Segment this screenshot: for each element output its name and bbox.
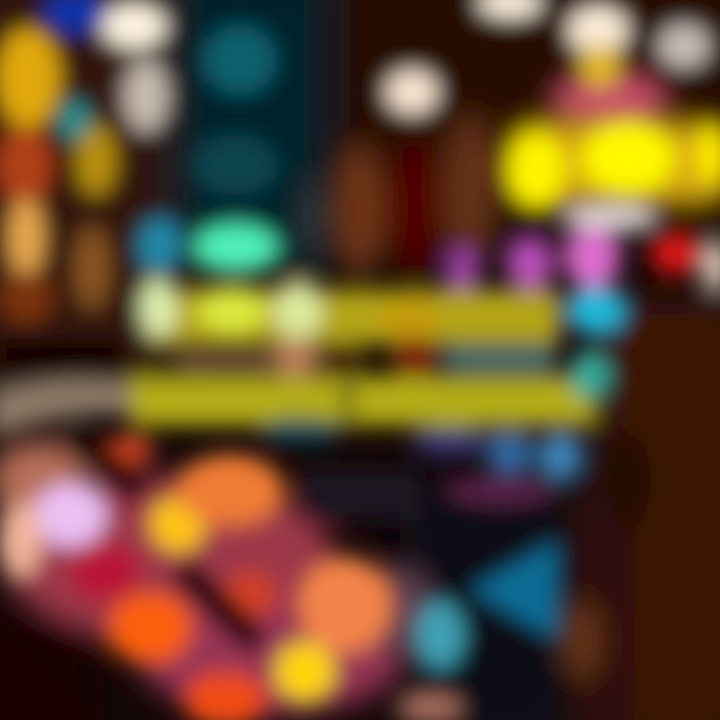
- teal and blue tiles under the title: [258, 351, 610, 504]
- yellow lantern top right: [508, 44, 720, 230]
- teal glow sign: [194, 224, 278, 272]
- left storefront lights: [0, 0, 120, 370]
- center teal signs: [138, 26, 278, 274]
- dark diagonal gaps: [0, 421, 420, 720]
- title: blurred yellow banner: [130, 278, 595, 432]
- right dark-red column: [560, 320, 720, 720]
- brown hanging shapes: [294, 110, 498, 282]
- teal triangle lower right: [470, 540, 558, 640]
- purple and red lights row: [444, 228, 720, 334]
- top white lamps: [102, 0, 710, 132]
- bottom bright spots: [0, 434, 464, 720]
- bottom colorful stalls: [0, 440, 436, 715]
- left curved grey band: [0, 379, 130, 438]
